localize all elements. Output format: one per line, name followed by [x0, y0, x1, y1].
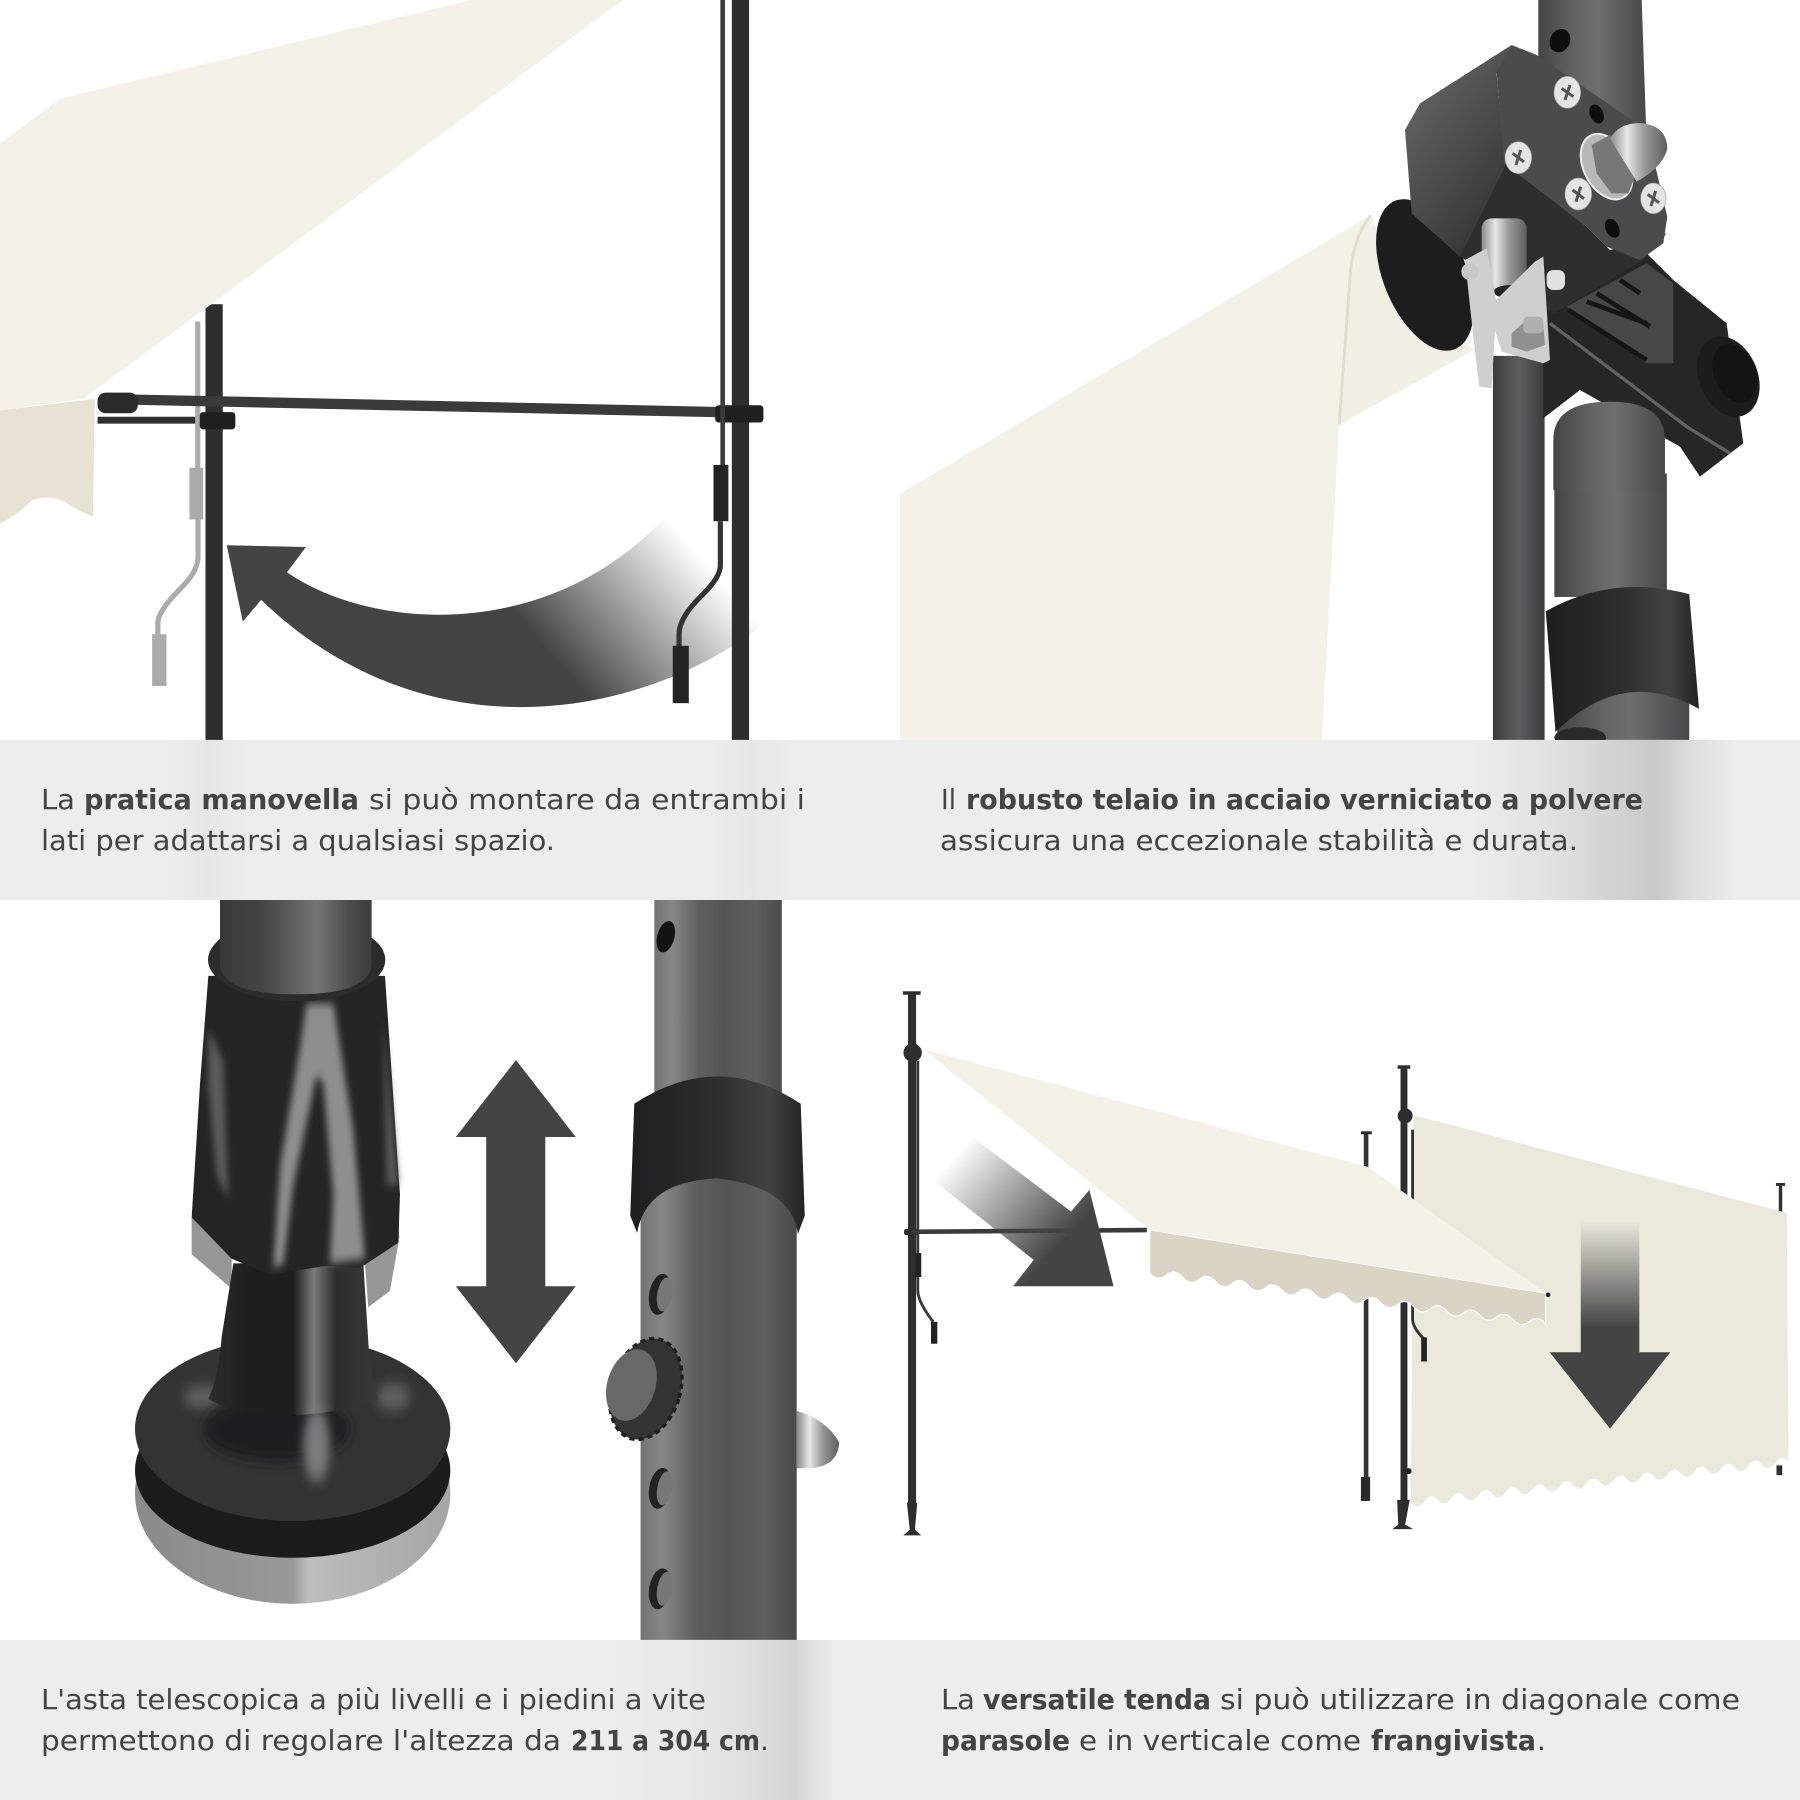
awning fabric	[900, 215, 1371, 740]
caption line 2: parasole	[941, 1724, 1070, 1757]
panel: crank image	[0, 0, 766, 740]
panel: telescopic foot image	[135, 900, 450, 1604]
tube hole	[1546, 26, 1574, 56]
box bottom face	[1412, 163, 1667, 313]
right crank	[673, 0, 728, 703]
caption band: frame	[900, 740, 1800, 900]
box front face	[1497, 45, 1667, 260]
box side face	[1405, 45, 1512, 257]
foot disc	[135, 1337, 450, 1521]
upper tube	[1538, 0, 1647, 143]
ghost crank	[152, 321, 203, 686]
down arrow	[1550, 1221, 1670, 1429]
silver bracket	[1465, 248, 1550, 388]
caption line 2: lati per adattarsi a qualsiasi spazio.	[41, 824, 555, 857]
rear pole left	[1364, 1132, 1368, 1500]
awning tip	[1546, 1293, 1550, 1297]
black clamp	[1540, 250, 1743, 477]
caption line 1: Il	[941, 783, 956, 816]
caption line 2: .	[760, 1724, 769, 1757]
caption line 1: robusto telaio in acciaio verniciato a polvere	[966, 783, 1643, 816]
rear fabric	[1339, 215, 1474, 425]
caption line 1: La	[41, 783, 75, 816]
panel: frame mechanism image	[900, 215, 1699, 748]
foot neck	[208, 1263, 378, 1415]
arm bar	[98, 393, 720, 420]
caption band: crank	[0, 740, 900, 900]
double arrow	[456, 1060, 576, 1363]
lower knob peek	[1554, 727, 1606, 748]
mechanism detail	[1356, 0, 1771, 490]
awning valance	[0, 399, 95, 523]
foot rim	[135, 1383, 450, 1558]
caption line 1	[41, 783, 805, 816]
disc shadow	[203, 1397, 350, 1461]
caption band: telescopic	[0, 1640, 900, 1800]
curved arrow	[227, 517, 766, 707]
ghost foot behind boot	[192, 1199, 399, 1307]
caption line 2: frangivista	[1371, 1724, 1536, 1757]
diagonal awning canopy	[923, 1049, 1546, 1293]
vertical screen pole	[1392, 1065, 1413, 1529]
upper hole	[653, 919, 678, 954]
caption line 2: permettono di regolare l'altezza da	[41, 1724, 561, 1757]
middle tube	[1554, 474, 1667, 597]
screen crank	[1406, 1130, 1427, 1474]
caption line 1: si può montare da entrambi i	[369, 783, 805, 816]
cap nut	[1570, 123, 1667, 208]
caption line 2: .	[1537, 1724, 1546, 1757]
boot collar	[208, 918, 385, 1001]
screw heads	[1505, 76, 1666, 214]
panel: awning usage image	[903, 991, 1789, 1535]
fabric curl shade	[1339, 215, 1371, 425]
thin rod	[1493, 356, 1545, 740]
main tube top	[1553, 402, 1665, 490]
lower tube	[1557, 689, 1689, 740]
caption line 1: si può utilizzare in diagonale come	[1220, 1683, 1740, 1716]
caption band: versatile	[900, 1640, 1800, 1800]
clamps	[200, 405, 763, 429]
disc highlights	[183, 1383, 410, 1411]
frame holes	[1586, 102, 1623, 240]
vertical screen	[1411, 1115, 1789, 1506]
tube knob	[598, 1330, 694, 1449]
caption line 1: versatile tenda	[983, 1683, 1211, 1716]
neck highlight	[303, 1408, 330, 1482]
rubber boot	[192, 976, 400, 1275]
scalloped valance	[1150, 1230, 1546, 1325]
tube collar	[1546, 587, 1699, 732]
screw crosses	[1513, 85, 1659, 206]
caption line 1: pratica manovella	[84, 783, 359, 816]
black disc	[1356, 185, 1494, 365]
collar	[630, 1077, 805, 1234]
caption line 2	[941, 1724, 1546, 1757]
caption line 2: e in verticale come	[1079, 1724, 1361, 1757]
diagonal arrow	[934, 1134, 1114, 1286]
far pole right	[1776, 1183, 1785, 1475]
boot highlights	[208, 1004, 398, 1268]
knob	[1685, 327, 1771, 426]
panel: double arrow and adjustable tube	[456, 900, 839, 1640]
caption line 2	[41, 1724, 769, 1757]
caption line 1: L'asta telescopica a più livelli e i piedini a vite	[41, 1683, 706, 1716]
right pole	[732, 0, 749, 740]
caption line 1	[941, 1683, 1740, 1716]
gray base reflection	[135, 1383, 450, 1604]
front pole	[903, 991, 922, 1535]
rear pole left cap and foot	[1361, 1131, 1372, 1501]
tube slots	[646, 1272, 675, 1611]
foot tube	[220, 900, 372, 994]
left pole	[205, 304, 223, 740]
upper tube	[654, 900, 782, 1095]
front crank	[915, 1061, 937, 1344]
cap nut	[797, 1411, 839, 1468]
front arm	[911, 1230, 1147, 1232]
caption line 2: 211 a 304 cm	[571, 1724, 760, 1757]
caption line 2: assicura una eccezionale stabilità e durata.	[940, 824, 1578, 857]
lower tube	[641, 1170, 797, 1640]
silver pin	[1482, 218, 1528, 298]
awning canopy	[0, 0, 623, 410]
bolts	[1461, 263, 1565, 352]
caption line 1: La	[941, 1683, 975, 1716]
